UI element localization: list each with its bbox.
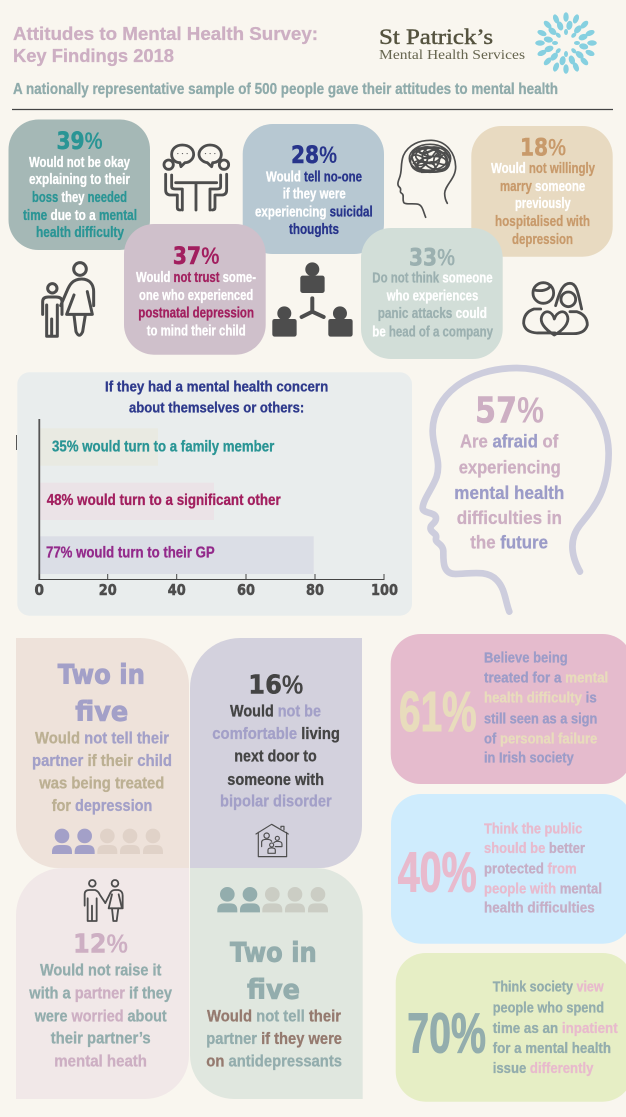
panel: 37% postnatal depression [124,224,266,355]
chart axes: 40 [168,581,186,599]
stat: 39%: 39% [56,127,102,155]
text: panic attacks: who experiences [386,288,478,305]
text: suicidal thoughts: experiencing suicidal [255,204,373,221]
chart axes: 20 [99,581,117,599]
text: public protected: health difficulties [484,900,595,917]
text: postnatal depression [136,269,256,340]
text: inpatient: issue differently [493,1060,594,1077]
text: boss [23,154,137,241]
text: antidepressants: partner if they were [206,1030,342,1048]
text: marry: depression [512,231,573,248]
heading: two in five: Two in [230,938,317,969]
panel: two in five, child [16,638,189,868]
text: bipolar: bipolar disorder [220,793,332,811]
heading: two in five [58,659,145,728]
text: panic attacks: panic attacks could [378,305,487,322]
icon: two of five people [52,829,163,854]
text: personal failure [484,649,608,767]
text: marry: previously [515,195,571,212]
text: inpatient [493,979,618,1077]
text: postnatal depression: one who experienced [139,287,253,304]
text: postnatal depression: postnatal depression [138,305,254,322]
panel: 28% suicidal thoughts [243,124,384,254]
chart axes: 60 [237,581,255,599]
text: partner [28,962,173,1070]
text: bipolar: next door to [234,748,317,766]
stat: 37%: 37% [173,242,219,270]
text: partner: Would not raise it [40,962,162,980]
chart title: If they had a mental health concern [105,379,328,396]
text: afraid: experiencing [459,457,561,477]
panel: 16% bipolar [190,638,362,868]
stat: 12%: 12% [73,929,128,960]
text: boss: Would not be okay [29,154,130,171]
text: personal failure: of personal failure [484,730,597,747]
panel: two in five, antidepressants [190,868,363,1099]
text: panic attacks [372,270,493,340]
title [13,24,318,66]
bar: significant other: 48% would turn to a significant other [47,492,281,509]
logo: St Patrick's Mental Health Services: Mental Health Services [379,48,525,63]
text: public protected: protected from [484,860,577,877]
heading: two in five: Two in [58,659,145,690]
logo: St Patrick's Mental Health Services: St Patrick’s [379,24,493,49]
text: boss: health difficulty [36,224,125,241]
text: child: for depression [52,797,152,815]
text: panic attacks: be head of a company [372,323,493,340]
text: personal failure: treated for a mental [484,669,608,686]
bar: family member [40,428,274,466]
chart axes: 80 [306,581,324,599]
text: postnatal depression: Would not trust some- [136,269,256,286]
chart title: about themselves or others: [129,400,304,417]
text: personal failure: Believe being [484,649,568,666]
stat: 40%: 40% [398,841,477,905]
heading: two in five: five [75,697,128,728]
text: child: Would not tell their [35,729,170,747]
text: antidepressants: Would not tell their [207,1008,342,1026]
text: bipolar [212,703,340,811]
panel: 40% public protected [391,794,626,944]
icon: two of five people [217,887,328,912]
chart axes [16,419,398,599]
chart axes: 0 [34,581,44,599]
text: antidepressants: on antidepressants [206,1053,342,1071]
text: public protected [484,820,602,917]
stat: 70%: 70% [407,1001,486,1065]
bar: significant other [40,483,281,520]
bar: GP: 77% would turn to their GP [46,545,215,562]
bar: GP [40,536,314,574]
text: afraid [454,432,564,552]
icon: couple holding hands [85,880,123,921]
chart axes: 100 [371,581,398,599]
text: afraid: mental health [454,483,564,503]
text: public protected: should be better [484,840,585,857]
text: partner: mental heath [54,1052,147,1070]
text: afraid: Are afraid of [460,432,559,452]
text: inpatient: Think society view [493,979,604,996]
text: marry: hospitalised with [495,213,590,230]
text: bipolar: someone with [227,771,324,789]
stat: 33%: 33% [409,244,455,272]
icon: head outline [423,368,609,612]
text: child [32,729,172,815]
bar: family member: 35% would turn to a family member [52,439,274,456]
icon: three connected colleagues [272,262,353,337]
logo: St Patrick's Mental Health Services [379,12,597,74]
text: personal failure: still seen as a sign [484,710,597,727]
text: personal failure: health difficulty is [484,690,597,707]
panel: 12% partner [16,868,189,1099]
text: bipolar: Would not be [230,703,321,721]
stat: 61%: 61% [399,680,477,744]
text: public protected: people with mental [484,880,602,897]
stat: 16%: 16% [248,669,303,700]
text: partner: with a partner if they [28,984,173,1002]
heading: two in five: five [247,974,300,1005]
text: partner: were worried about [34,1008,167,1026]
icon: head with tangled brain [398,140,456,217]
text: bipolar: comfortable living [212,725,340,743]
text: marry [491,160,596,248]
text: postnatal depression: to mind their child [147,323,246,340]
icon: couple with heart [524,283,587,335]
panel: 70% inpatient [396,953,626,1102]
text: child: was being treated [38,775,164,793]
text: antidepressants [206,1008,342,1071]
text: inpatient: people who spend [493,999,604,1016]
stat: 28%: 28% [291,141,337,169]
text: partner: their partner’s [51,1029,151,1047]
text: boss: explaining to their [29,171,130,188]
text: marry: Would not willingly [491,160,596,177]
text: marry: marry someone [500,178,585,195]
icon: family in house [256,824,288,857]
text: inpatient: time as an inpatient [493,1020,618,1037]
panel: bar chart [16,372,412,616]
stat: 57%: 57% [475,390,544,432]
text: personal failure: in Irish society [484,750,574,767]
text: boss: time due to a mental [23,207,137,224]
text: suicidal thoughts: if they were [283,186,346,202]
panel: 57% head outline [423,368,609,612]
text: inpatient: for a mental health [493,1040,611,1057]
title: Attitudes to Mental Health Survey: [13,24,318,44]
stat: 18%: 18% [520,134,566,162]
text: suicidal thoughts: thoughts [289,221,339,238]
chart title [105,379,328,417]
text: suicidal thoughts [255,169,373,238]
text: boss: boss they needed [32,189,127,206]
title: Key Findings 2018 [13,46,174,66]
text: panic attacks: Do not think someone [372,270,493,287]
heading: two in five [230,938,317,1005]
icon: mother and child [43,263,94,336]
text: afraid: the future [470,532,548,552]
text: public protected: Think the public [484,820,582,837]
panel: 18% marry [471,126,613,257]
text: afraid: difficulties in [457,508,562,528]
panel: 39% boss [8,120,150,250]
icon: two people talking at a table [164,145,229,210]
text: child: partner if their child [32,752,172,770]
panel: 33% panic attacks [361,228,503,359]
panel: 61% personal failure [391,634,626,784]
text: suicidal thoughts: Would tell no-one [266,169,362,186]
